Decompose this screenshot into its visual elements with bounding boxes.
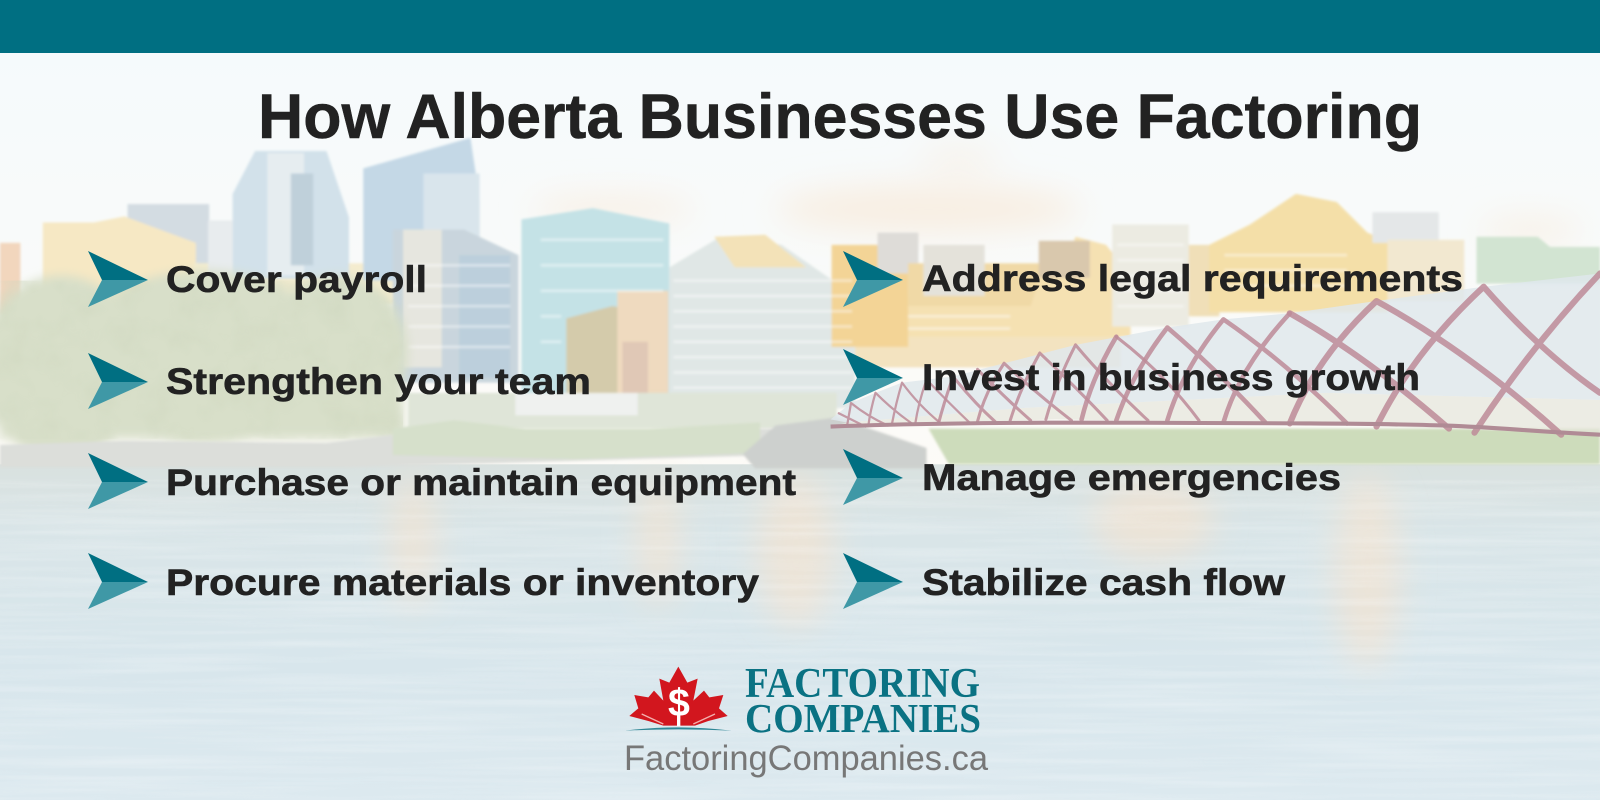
sky [0,51,1600,480]
arrow icon 8 [843,553,903,609]
lattice arcs [839,273,1600,435]
icon: maple leaf with dollar sign: $ [668,681,690,725]
window banding [408,240,1347,388]
item: Manage emergencies: Manage emergencies [922,457,1341,498]
clouds [531,150,1582,240]
left list [88,251,796,609]
item: Cover payroll: Cover payroll [166,259,427,300]
item: Address legal requirements: Address legal requirements [922,258,1463,299]
item: Strengthen your team: Strengthen your team [166,361,591,402]
item: Invest in business growth: Invest in business growth [922,357,1420,398]
logo wordmark: FACTORING [745,661,980,707]
city buildings [0,138,1600,408]
arrow icon 4 [88,553,148,609]
bridge [831,273,1600,435]
item: Stabilize cash flow: Stabilize cash flow [922,562,1285,603]
river bank and rocks [0,417,1600,468]
item: Purchase or maintain equipment: Purchase or maintain equipment [166,462,796,503]
bridge underside [831,393,1600,435]
top teal band [0,0,1600,53]
river water [0,464,1600,800]
arrow icon 1 [88,251,148,307]
website url: FactoringCompanies.ca [624,739,989,778]
arrow icon 3 [88,453,148,509]
arrow icon 6 [843,349,903,405]
water reflections [391,474,1400,668]
arrow icon 2 [88,353,148,409]
arrow icon 5 [843,251,903,307]
logo: COMPANIES [745,695,981,741]
icon: maple leaf with dollar sign [625,667,732,731]
low riverside buildings and bank [408,393,837,429]
water ripples [0,480,1600,800]
logo [625,661,981,741]
item: Procure materials or inventory: Procure materials or inventory [166,562,759,603]
title: How Alberta Businesses Use Factoring [258,82,1422,152]
bridge glass canopy [831,273,1600,422]
trees [0,270,408,459]
right list [843,251,1463,609]
arrow icon 7 [843,449,903,505]
